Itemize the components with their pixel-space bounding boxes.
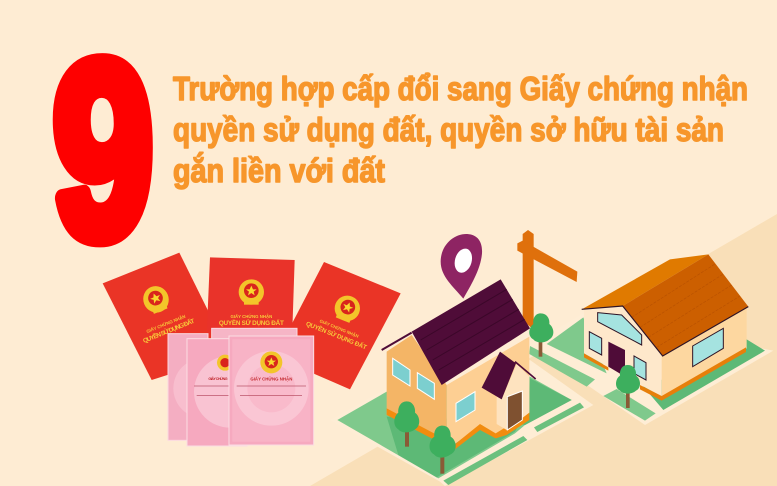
houses illustration: [330, 230, 773, 486]
left lot: [330, 360, 593, 486]
left house: [382, 279, 536, 450]
red certificate left: QUYỀN SỬ DỤNG ĐẤT: [141, 315, 196, 345]
red certificate center: GIẤY CHỨNG NHẬN: [230, 314, 272, 319]
right lot: [529, 313, 773, 425]
big number 9: 9: [53, 11, 153, 289]
red certificate left: GIẤY CHỨNG NHẬN: [146, 314, 186, 334]
location pin: [441, 234, 482, 299]
title: gắn liền với đất: [173, 152, 385, 189]
pink certificate front: [229, 336, 314, 445]
red certificate right: [289, 262, 401, 389]
pink certificate middle: [187, 339, 266, 446]
pink certificate middle: GIẤY CHỨNG: [208, 376, 228, 381]
red certificate left: [103, 253, 230, 380]
tree 1: [394, 401, 419, 447]
red certificate right: QUYỀN SỬ DỤNG ĐẤT: [305, 318, 369, 351]
pink certificate left: [168, 334, 233, 440]
title: [173, 70, 748, 189]
red certificate center: [207, 257, 295, 340]
red certificate center: QUYỀN SỬ DỤNG ĐẤT: [219, 317, 284, 327]
tree 2: [430, 426, 456, 474]
right house: [582, 254, 748, 401]
red certificate right: GIẤY CHỨNG NHẬN: [319, 318, 359, 339]
pink certificate back: [212, 328, 297, 348]
tree 4: [616, 365, 640, 408]
tree 3: [529, 313, 553, 357]
signpost: [517, 230, 577, 330]
certificates group: [103, 253, 401, 446]
pink certificate front: GIẤY CHỨNG NHẬN: [250, 377, 292, 382]
